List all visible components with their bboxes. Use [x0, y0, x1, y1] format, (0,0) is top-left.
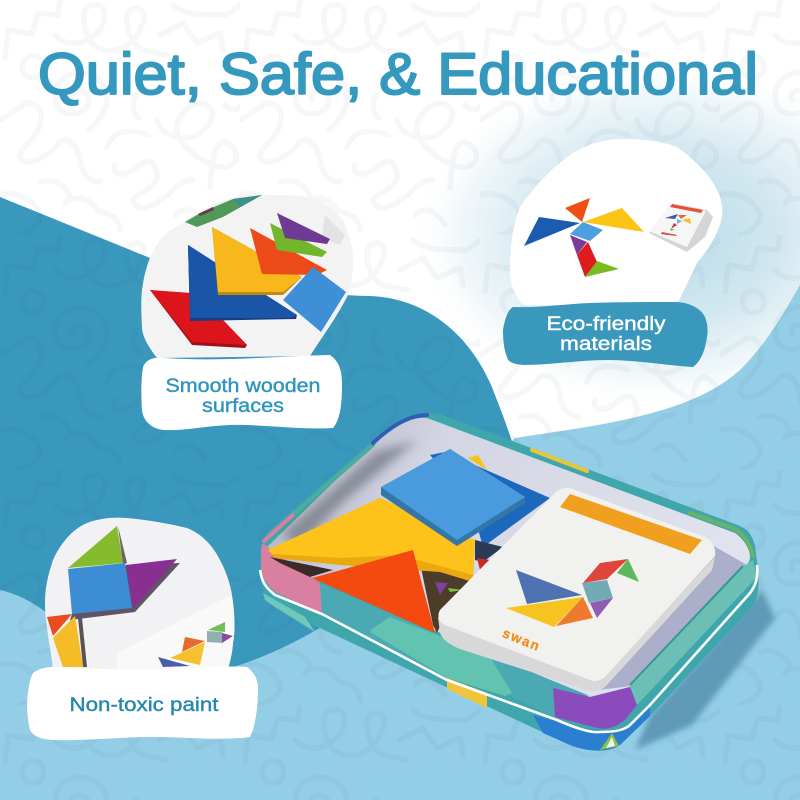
panel: non-toxic paint: [27, 510, 258, 740]
label: eco-friendly materials: Eco-friendly: [546, 313, 666, 335]
tin body: [261, 413, 759, 751]
photo: pinwheel and card box: [510, 139, 722, 305]
tin interior: [267, 418, 750, 697]
tin lower band colours: [263, 593, 315, 632]
card bar: [560, 494, 702, 554]
label: smooth wooden surfaces: [141, 355, 342, 430]
panel: smooth wooden surfaces: [141, 195, 353, 430]
interior shadow beside card: [598, 545, 747, 690]
tin white rim: [260, 565, 757, 732]
tin shadow: [635, 590, 775, 750]
interior reflection: [282, 440, 418, 545]
label: eco-friendly materials: materials: [560, 333, 652, 355]
label: smooth wooden surfaces: Smooth wooden: [166, 375, 320, 397]
swan figure: [506, 559, 639, 627]
title: Quiet, Safe, & Educational: [38, 42, 758, 107]
piece: small yellow tip: [468, 455, 487, 470]
tin right wall: [630, 560, 757, 705]
photo: wooden pieces: [141, 195, 353, 358]
tin front wall: [261, 543, 637, 729]
tin rim colours: [264, 415, 753, 556]
dark gaps: [270, 540, 503, 633]
product: tin with tangram pieces and card: [260, 413, 775, 751]
label: eco-friendly materials: [503, 302, 708, 367]
piece: yellow triangle: [268, 498, 475, 582]
card label: swan: swan: [500, 625, 543, 654]
label: smooth wooden surfaces: surfaces: [202, 395, 284, 417]
piece: dark blue: [430, 452, 550, 547]
piece: red-orange triangle: [312, 550, 435, 633]
label: non-toxic paint: [27, 667, 258, 740]
label: non-toxic paint: Non-toxic paint: [70, 694, 219, 716]
panel: eco-friendly materials: [503, 139, 722, 367]
photo: painted pieces: [45, 518, 234, 670]
card deck: [438, 557, 715, 691]
piece: blue square: [381, 449, 525, 546]
